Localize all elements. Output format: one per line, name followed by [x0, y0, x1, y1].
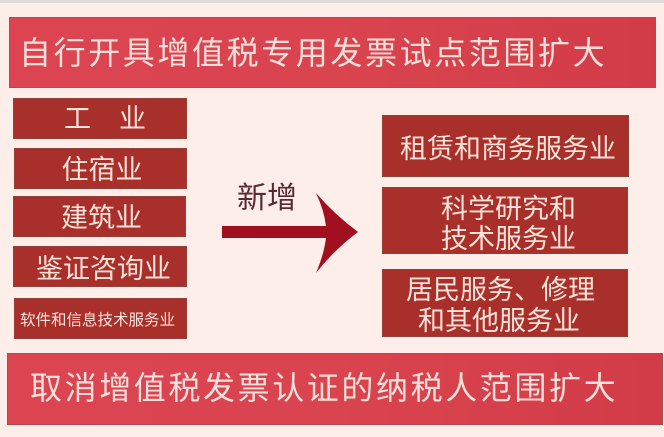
item: scientific research and technical services: 科学研究和 — [441, 194, 576, 224]
heading: certification cancellation banner: 取消增值税发票认证的纳税人范围扩大 — [30, 370, 618, 406]
item: construction: 建筑业 — [61, 203, 142, 233]
item: scientific research and technical services — [382, 187, 628, 254]
item: resident, repair and other services: 居民服务、修理 — [406, 275, 595, 305]
item: industry — [13, 98, 187, 139]
item: appraisal consulting — [13, 246, 187, 287]
heading: certification cancellation banner — [7, 353, 663, 425]
top edge band — [0, 0, 664, 3]
item: software and IT services: 软件和信息技术服务业 — [20, 312, 175, 329]
item: software and IT services — [14, 298, 187, 339]
item: leasing and business services — [382, 115, 629, 177]
item: industry: 业 — [119, 104, 146, 134]
item: leasing and business services: 租赁和商务服务业 — [400, 134, 616, 164]
arrow — [222, 193, 358, 273]
panel: existing industries — [13, 98, 187, 339]
heading: pilot scope banner: 自行开具增值税专用发票试点范围扩大 — [19, 35, 607, 71]
item: accommodation: 住宿业 — [62, 155, 142, 185]
label: newly added: 新增 — [237, 182, 297, 215]
panel: added industries — [382, 115, 629, 337]
heading: pilot scope banner — [9, 17, 656, 88]
item: scientific research and technical services: 技术服务业 — [441, 224, 576, 254]
item: resident, repair and other services — [382, 269, 628, 337]
item: appraisal consulting: 鉴证咨询业 — [36, 254, 171, 284]
item: industry: 工 — [64, 104, 91, 134]
item: accommodation — [14, 148, 187, 189]
item: resident, repair and other services: 和其他服务业 — [418, 306, 580, 336]
item: construction — [13, 196, 186, 237]
